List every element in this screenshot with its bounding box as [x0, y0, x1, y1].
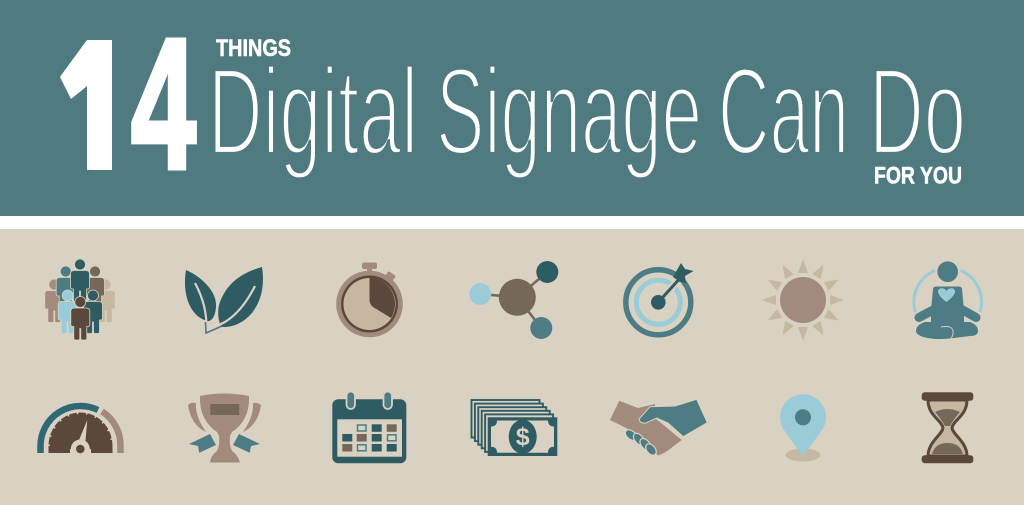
beige background panel: [0, 229, 1024, 505]
main title: Digital: [208, 44, 418, 181]
icon: stack of money: $: [516, 423, 530, 451]
small heading: things: THINGS: [216, 35, 291, 62]
big number 14: 1: [40, 3, 130, 210]
big number 14: 4: [131, 1, 196, 208]
icon: hourglass: [922, 392, 973, 463]
big number 14: [60, 38, 197, 170]
main title: Signage: [436, 44, 702, 181]
icon: calendar: [332, 392, 406, 463]
main title: [208, 44, 966, 181]
icon: crowd of people: [45, 259, 115, 340]
header band: [0, 0, 1024, 216]
main title: Do: [869, 44, 966, 181]
icon: stopwatch: [336, 262, 403, 337]
icon: speedometer: [40, 406, 121, 458]
small heading: for you: FOR YOU: [874, 162, 962, 190]
icon: meditating figure: [914, 261, 982, 339]
icon: stack of money: [472, 400, 557, 456]
main title: Can: [718, 44, 849, 181]
icon: target with dart: [626, 263, 694, 335]
icon: trophy: [188, 394, 261, 462]
icon: map pin: [780, 394, 826, 462]
icon: leaves: [185, 267, 263, 333]
icon: handshake: [610, 399, 707, 457]
icon: network nodes: [469, 261, 558, 339]
icon: sun: [762, 259, 844, 341]
